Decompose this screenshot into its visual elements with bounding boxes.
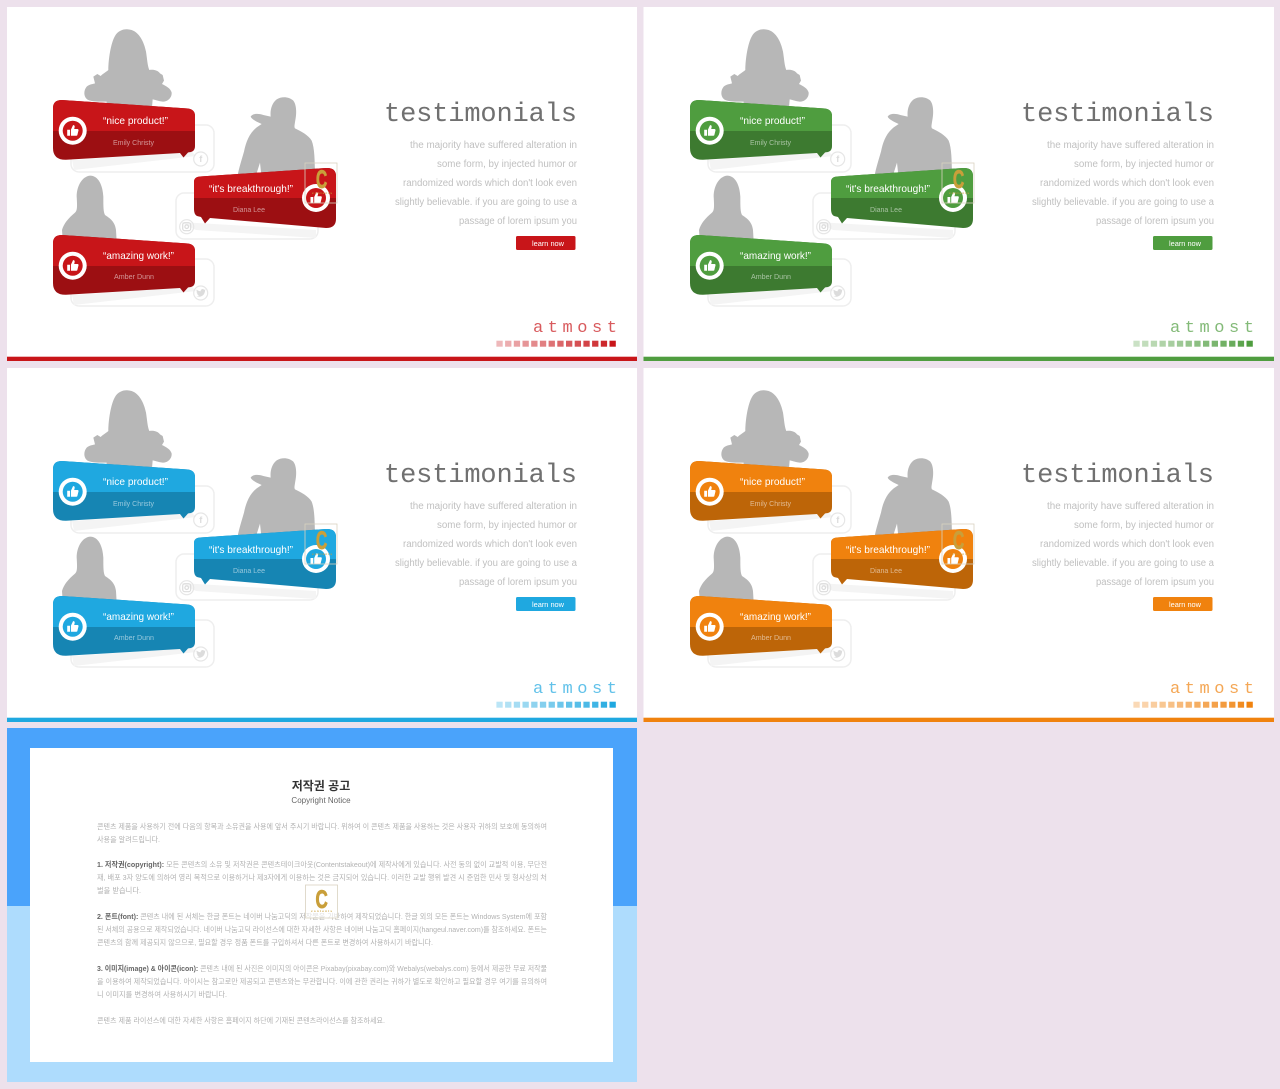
icon: twitter [194, 647, 208, 661]
testimonial card: Diana Lee [813, 168, 973, 239]
text block: description [395, 501, 578, 588]
watermark: gold C: C [316, 166, 327, 194]
text block: font: 2. 폰트(font): 콘텐츠 내에 된 서체는 한글 폰트는 네이버 나눔고딕의 저작물을 기반하여 제작되었습니다. 한글 외의 모든 폰트는 Windows System에 포함 [97, 911, 547, 921]
testimonial card: Emily Christy: Emily Christy [750, 499, 791, 508]
testimonial card: Amber Dunn: Amber Dunn [751, 272, 791, 281]
heading: testimonials: testimonials [384, 100, 577, 130]
testimonial card: Amber Dunn: “amazing work!” [740, 250, 811, 262]
watermark: gold C [305, 524, 337, 564]
icon: twitter [831, 647, 845, 661]
text block: description: some form, by injected humor or [437, 520, 578, 531]
text block: description: passage of lorem ipsum you [459, 216, 577, 227]
text block: description: some form, by injected humor or [437, 159, 578, 170]
text block: copyright: 재, 배포 3자 양도에 의하여 영리 목적으로 이용하거나 제3자에게 이용하는 것은 금지되어 있습니다. 이러한 교발 행위 발견 시 준엄한 민사 및 형사상의 처 [97, 872, 547, 882]
text block: description: the majority have suffered alteration in [1047, 501, 1214, 512]
icon: thumbs up [696, 117, 724, 145]
text block: font [97, 911, 547, 947]
testimonial card: Emily Christy: “nice product!” [103, 115, 168, 127]
silhouette: woman holding tablet [84, 390, 172, 468]
icon: thumbs up [939, 184, 967, 212]
slide: blue testimonials [7, 368, 637, 722]
text block: description: randomized words which don't look even [1040, 178, 1214, 189]
testimonial card: Emily Christy: Emily Christy [113, 138, 154, 147]
silhouette: woman with long hair [62, 176, 117, 242]
testimonial card: Emily Christy [690, 100, 851, 172]
button: learn now [516, 597, 576, 611]
testimonial card: Amber Dunn [690, 235, 851, 306]
silhouette: man with glasses [237, 97, 315, 178]
testimonial card: Emily Christy: Emily Christy [750, 138, 791, 147]
text block: introduction: 사용을 알려드립니다. [97, 834, 160, 844]
testimonial card: Diana Lee: Diana Lee [870, 205, 902, 214]
testimonial card: Emily Christy: “nice product!” [740, 476, 805, 488]
silhouette: woman holding tablet [84, 29, 172, 107]
icon: facebook [194, 152, 208, 166]
text block: description [1032, 501, 1215, 588]
watermark: gold C [942, 524, 974, 564]
silhouette: woman holding tablet [721, 390, 809, 468]
button: learn now: learn now [532, 602, 565, 609]
panel: copyright notice [7, 728, 637, 1082]
button: learn now [516, 236, 576, 250]
testimonial card: Diana Lee [176, 529, 336, 600]
watermark: gold C: contents [312, 191, 332, 195]
watermark: gold C: contents [311, 909, 332, 913]
icon: twitter [194, 286, 208, 300]
colour squares [496, 702, 616, 708]
icon: thumbs up [59, 478, 87, 506]
logo: atmost: atmost [1170, 680, 1254, 699]
heading: copyright notice: 저작권 공고 [292, 778, 350, 793]
text block: introduction: 콘텐츠 제품을 사용하기 전에 다음의 항목과 소유권을 사용에 앞서 주시기 바랍니다. 위하여 이 콘텐츠 제품을 사용하는 것은 사용자 귀하의 보호에 동의하여 [97, 821, 547, 831]
silhouette: man with glasses [237, 458, 315, 539]
testimonial card: Diana Lee: Diana Lee [233, 566, 265, 575]
watermark: gold C: contents [949, 191, 969, 195]
watermark: gold C: C [953, 166, 964, 194]
icon: facebook [831, 513, 845, 527]
testimonial card: Amber Dunn: “amazing work!” [103, 611, 174, 623]
icon: facebook: f [836, 154, 840, 164]
testimonial card: Amber Dunn: Amber Dunn [114, 272, 154, 281]
text block: description: the majority have suffered alteration in [410, 140, 577, 151]
icon: thumbs up [696, 613, 724, 641]
text block: description: randomized words which don't look even [403, 178, 577, 189]
text block: description: passage of lorem ipsum you [1096, 577, 1214, 588]
slide: green testimonials [644, 7, 1274, 361]
text block: description: slightly believable. if you are going to use a [395, 197, 577, 208]
text block: description: slightly believable. if you are going to use a [395, 558, 577, 569]
testimonial card: Amber Dunn: “amazing work!” [103, 250, 174, 262]
icon: instagram [180, 220, 194, 234]
text block: copyright [97, 859, 547, 895]
text block: description: the majority have suffered alteration in [1047, 140, 1214, 151]
icon: thumbs up [59, 252, 87, 280]
icon: thumbs up [59, 117, 87, 145]
colour squares [496, 341, 616, 347]
text block: image and icon: 3. 이미지(image) & 아이콘(icon): 콘텐츠 내에 된 사진은 이미지의 아이콘은 Pixabay(pixabay.com)와 Webalys(webalys.com) 등에서 제공한 무료 저작물 [97, 963, 547, 973]
watermark: gold C: C [953, 527, 964, 555]
button: learn now: learn now [1169, 602, 1202, 609]
watermark: gold C [305, 163, 337, 203]
bottom bar [7, 357, 637, 361]
text block: description: randomized words which don't look even [403, 539, 577, 550]
icon: facebook: f [199, 515, 203, 525]
icon: thumbs up [59, 613, 87, 641]
icon: thumbs up [696, 252, 724, 280]
testimonial card: Amber Dunn [53, 235, 214, 306]
testimonial card: Amber Dunn: “amazing work!” [740, 611, 811, 623]
testimonial card: Diana Lee: “it's breakthrough!” [209, 183, 293, 195]
colour squares [1133, 341, 1253, 347]
silhouette: man with glasses [874, 458, 952, 539]
button: learn now [1153, 236, 1212, 250]
text block: description: slightly believable. if you are going to use a [1032, 558, 1214, 569]
text block: introduction [97, 821, 547, 844]
silhouette: man with glasses [874, 97, 952, 178]
icon: thumbs up [302, 545, 330, 573]
text block: copyright: 벌을 받습니다. [97, 885, 141, 895]
slide: orange testimonials [644, 368, 1274, 722]
text block: image and icon: 니 이미지를 변경하여 사용하시기 바랍니다. [97, 989, 227, 999]
icon: thumbs up [939, 545, 967, 573]
heading: copyright notice [291, 778, 351, 805]
testimonial card: Diana Lee: “it's breakthrough!” [209, 544, 293, 556]
watermark: gold C: contents [312, 552, 332, 556]
silhouette: woman with long hair [699, 537, 754, 603]
icon: twitter [831, 286, 845, 300]
text block: description: slightly believable. if you are going to use a [1032, 197, 1214, 208]
text block: image and icon [97, 963, 547, 999]
text block: image and icon: 을 이용하여 제작되었습니다. 아이시는 참고로만 제공되고 콘텐츠와는 무관합니다. 이에 관한 권리는 귀하가 별도로 확인하고 필요할 경우 여기를 유의하여 [97, 976, 547, 986]
logo: atmost: atmost [1170, 319, 1254, 338]
icon: instagram [180, 581, 194, 595]
watermark: gold C [306, 885, 338, 918]
testimonial card: Emily Christy: “nice product!” [103, 476, 168, 488]
icon: facebook [831, 152, 845, 166]
testimonial card: Emily Christy [53, 461, 214, 533]
text block: font: 된 서체의 공용으로 제작되었습니다. 네이버 나눔고딕 라이선스에 대한 자세한 사항은 네이버 나눔고딕 홈페이지(hangeul.naver.com)를 참조하세요. 폰트는 [97, 924, 547, 934]
testimonial card: Amber Dunn: Amber Dunn [114, 633, 154, 642]
text block: description: some form, by injected humor or [1074, 520, 1215, 531]
logo: atmost: atmost [533, 319, 617, 338]
testimonial card: Emily Christy [690, 461, 851, 533]
text block: description [1032, 140, 1215, 227]
bottom bar [644, 718, 1274, 722]
testimonial card: Emily Christy: Emily Christy [113, 499, 154, 508]
testimonial card: Amber Dunn [690, 596, 851, 667]
watermark: gold C [942, 163, 974, 203]
text block: copyright: 1. 저작권(copyright): 모든 콘텐츠의 소유 및 저작권은 콘텐츠테이크아웃(Contentstakeout)에 제작사에게 있습니다. 사전 동의 없이 교발적 이용, 무단전 [97, 859, 547, 869]
text block: description [395, 140, 578, 227]
text block: description: some form, by injected humor or [1074, 159, 1215, 170]
text block: font: 콘텐츠의 함께 제공되지 않으므로, 필요할 경우 정품 폰트를 구입하셔서 다른 폰트로 변경하여 사용하시기 바랍니다. [97, 937, 433, 947]
heading: testimonials: testimonials [384, 461, 577, 491]
testimonial card: Diana Lee: “it's breakthrough!” [846, 544, 930, 556]
icon: thumbs up [696, 478, 724, 506]
heading: testimonials: testimonials [1021, 461, 1214, 491]
heading: copyright notice: Copyright Notice [291, 796, 351, 805]
testimonial card: Diana Lee: “it's breakthrough!” [846, 183, 930, 195]
text block: description: passage of lorem ipsum you [459, 577, 577, 588]
bottom bar [7, 718, 637, 722]
button: learn now: learn now [532, 241, 565, 248]
button: learn now: learn now [1169, 241, 1202, 248]
button: learn now [1153, 597, 1212, 611]
testimonial card: Diana Lee: Diana Lee [233, 205, 265, 214]
icon: instagram [817, 220, 831, 234]
silhouette: woman with long hair [699, 176, 754, 242]
icon: facebook: f [836, 515, 840, 525]
watermark: gold C: C [316, 527, 327, 555]
icon: instagram [817, 581, 831, 595]
testimonial card: Emily Christy: “nice product!” [740, 115, 805, 127]
watermark: gold C: contents [949, 552, 969, 556]
icon: thumbs up [302, 184, 330, 212]
logo: atmost: atmost [533, 680, 617, 699]
testimonial card: Emily Christy [53, 100, 214, 172]
testimonial card: Amber Dunn: Amber Dunn [751, 633, 791, 642]
text block: description: passage of lorem ipsum you [1096, 216, 1214, 227]
slide: red testimonials [7, 7, 637, 361]
watermark: gold C: C [316, 886, 328, 914]
silhouette: woman holding tablet [721, 29, 809, 107]
text block: description: randomized words which don't look even [1040, 539, 1214, 550]
silhouette: woman with long hair [62, 537, 117, 603]
testimonial card: Diana Lee [176, 168, 336, 239]
testimonial card: Amber Dunn [53, 596, 214, 667]
bottom bar [644, 357, 1274, 361]
colour squares [1133, 702, 1253, 708]
icon: facebook: f [199, 154, 203, 164]
testimonial card: Diana Lee [813, 529, 973, 600]
icon: facebook [194, 513, 208, 527]
testimonial card: Diana Lee: Diana Lee [870, 566, 902, 575]
text block: license note: 콘텐츠 제품 라이선스에 대한 자세한 사항은 홈페이지 하단에 기재된 콘텐츠라이선스를 참조하세요. [97, 1015, 385, 1025]
text block: description: the majority have suffered alteration in [410, 501, 577, 512]
heading: testimonials: testimonials [1021, 100, 1214, 130]
